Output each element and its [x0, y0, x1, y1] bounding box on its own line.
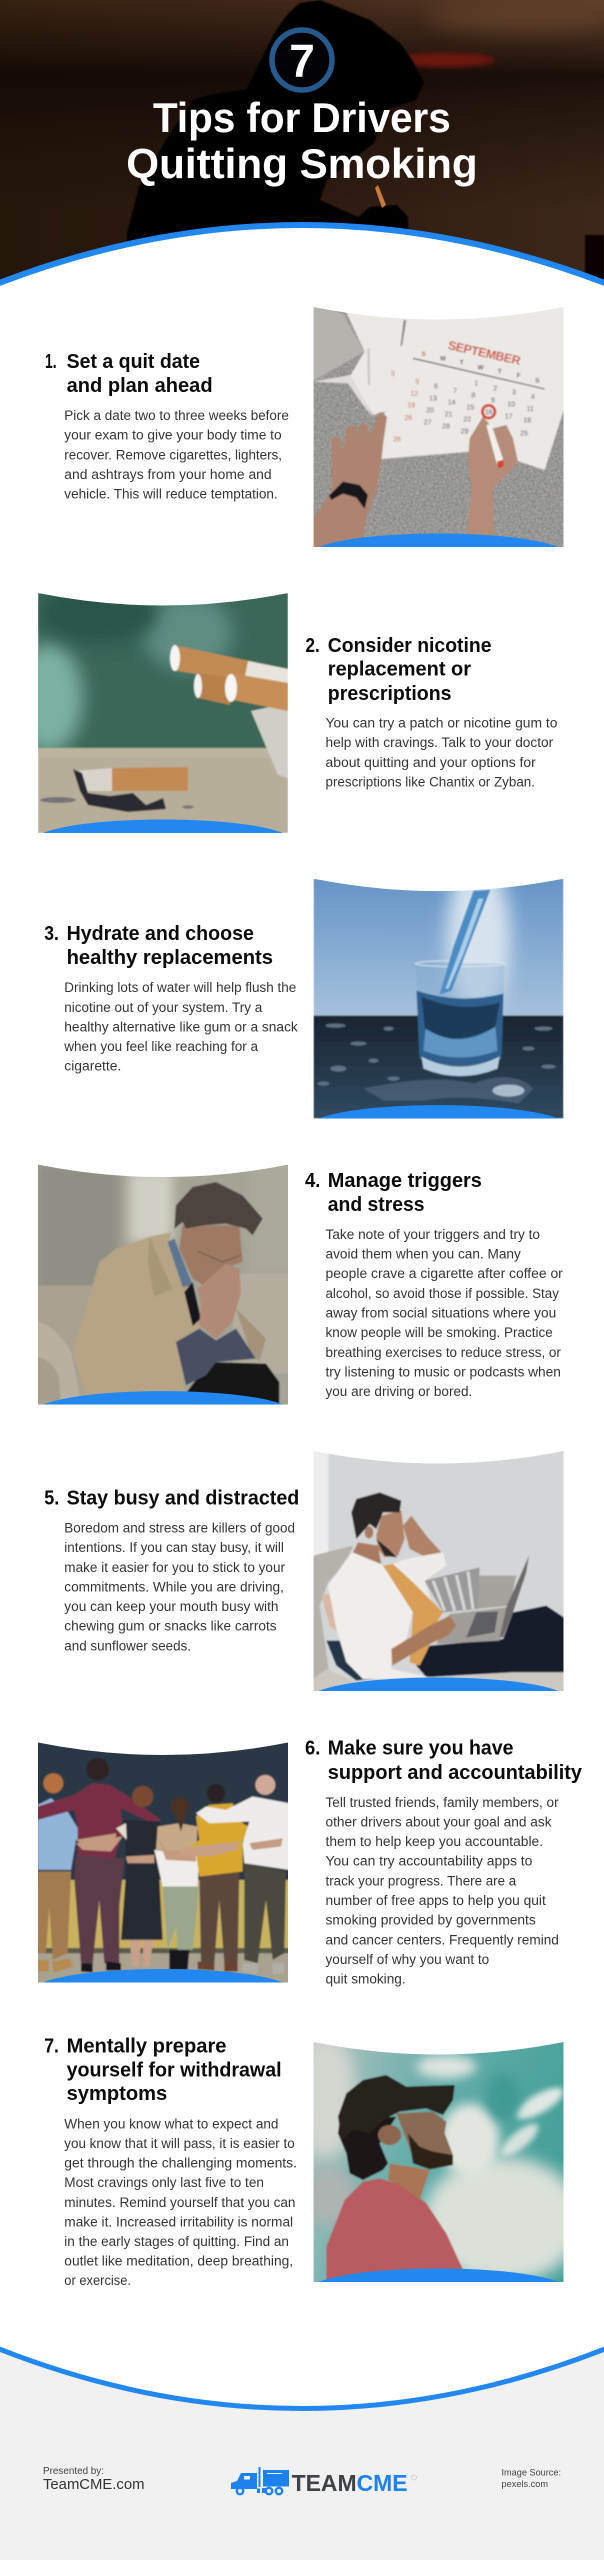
tip 3 heading: 3. [44, 923, 59, 945]
tip 4 body text: alcohol, so avoid those if possible. Stay [326, 1286, 559, 1301]
tip 1 photo: calendar and hands: T [498, 369, 502, 376]
footer: presented by: Presented by: [43, 2465, 104, 2477]
tip 6 heading: support and accountability [328, 1762, 583, 1784]
tip 7 heading: 7. [44, 2036, 59, 2058]
tip 6 body text: quit smoking. [326, 1972, 406, 1987]
tip 7 body text: When you know what to expect and [64, 2116, 278, 2131]
tip 4 body text: people crave a cigarette after coffee or [326, 1266, 563, 1281]
tip 1 photo: calendar and hands: 13 [429, 396, 437, 403]
tip 4 heading: Manage triggers [328, 1170, 482, 1192]
tip 2 body text: about quitting and your options for [326, 755, 536, 770]
tip 3 heading: Hydrate and choose [67, 923, 254, 945]
tip 7 body text: minutes. Remind yourself that you can [64, 2195, 296, 2210]
tip 6 body text: yourself of why you want to [326, 1952, 489, 1967]
tip 1 photo: calendar and hands: 29 [461, 428, 469, 435]
footer: presented by: TeamCME.com [43, 2476, 144, 2493]
tip 4 body text: Take note of your triggers and try to [326, 1227, 540, 1242]
tip 4 body text: you are driving or bored. [326, 1384, 472, 1399]
tip 6 body text: them to help keep you accountable. [326, 1834, 543, 1849]
tip 7 body text [64, 2116, 297, 2288]
tip 1 photo: calendar and hands: 20 [426, 407, 434, 414]
tip 2 heading: Consider nicotine [328, 635, 492, 657]
tip 1 photo: calendar and hands: 22 [463, 416, 471, 423]
tip 4 body text: know people will be smoking. Practice [326, 1325, 553, 1340]
tip 5 heading: Stay busy and distracted [67, 1487, 299, 1509]
footer: image source: Image Source: [502, 2468, 561, 2479]
tip 6 heading [305, 1738, 583, 1784]
tip 5 body text: chewing gum or snacks like carrots [64, 1619, 277, 1634]
tip 7 body text: get through the challenging moments. [64, 2156, 297, 2171]
tip 1 photo: calendar and hands [313, 305, 566, 552]
tip 1 photo: calendar and hands: 21 [445, 412, 453, 419]
tip 5 body text: Boredom and stress are killers of good [64, 1520, 295, 1536]
tip 1 photo: calendar and hands: 3 [512, 390, 516, 397]
tip 5 body text: commitments. While you are driving, [64, 1579, 284, 1594]
tip 2 body text: help with cravings. Talk to your doctor [326, 735, 554, 750]
tip 4 heading: and stress [328, 1194, 424, 1216]
tip 1 body text: recover. Remove cigarettes, lighters, [64, 447, 282, 462]
tip 5 photo: man on sofa with laptop [313, 1449, 566, 1696]
tip 5 heading: 5. [44, 1487, 59, 1509]
tip 2 heading: replacement or [328, 659, 471, 681]
tip 1 photo: calendar and hands: 12 [410, 391, 418, 398]
tip 1 heading [45, 351, 213, 397]
tip 7 body text: make it. Increased irritability is normal [64, 2214, 293, 2229]
tip 2 heading: prescriptions [328, 683, 452, 705]
tip 6 body text: number of free apps to help you quit [326, 1893, 546, 1908]
tip 4 heading [305, 1170, 482, 1216]
header number badge: 7 [289, 34, 315, 86]
top white curve with blue edge [0, 225, 604, 330]
tip 1 photo: calendar and hands: T [460, 359, 464, 366]
tip 3 heading: healthy replacements [67, 947, 273, 969]
tip 4 body text: away from social situations where you [326, 1306, 556, 1320]
tip 1 photo: calendar and hands: 7 [453, 388, 457, 395]
tip 5 body text: make it easier for you to stick to your [64, 1560, 285, 1575]
tip 1 photo: calendar and hands: 18 [523, 418, 531, 425]
header number badge [272, 30, 332, 90]
tip 6 body text: smoking provided by governments [326, 1913, 536, 1928]
tip 7 heading: Mentally prepare [67, 2036, 226, 2058]
title: Tips for Drivers [153, 94, 451, 141]
tip 4 body text [326, 1227, 563, 1399]
tip 7 heading [44, 2036, 282, 2105]
tip 1 body text: Pick a date two to three weeks before [64, 408, 289, 423]
footer: Team CME truck logo [231, 2467, 416, 2496]
tip 1 photo: calendar and hands: 26 [404, 415, 412, 422]
tip 2 body text: prescriptions like Chantix or Zyban. [326, 774, 535, 789]
tip 7 photo: man in cap facing sky [314, 2042, 564, 2282]
tip 7 body text: Most cravings only last five to ten [64, 2175, 264, 2190]
tip 6 body text: and cancer centers. Frequently remind [326, 1932, 559, 1947]
footer panel with blue curve [0, 2347, 604, 2560]
tip 1 photo: calendar and hands: 9 [491, 397, 495, 404]
tip 2 body text [326, 716, 557, 789]
tip 6 body text: Tell trusted friends, family members, or [326, 1795, 559, 1810]
tip 6 heading: 6. [305, 1738, 320, 1760]
tip 2 heading [306, 635, 492, 705]
tip 4 body text: try listening to music or podcasts when [326, 1364, 561, 1379]
tip 7 heading: yourself for withdrawal [67, 2060, 282, 2082]
tip 3 body text: healthy alternative like gum or a snack [64, 1019, 298, 1034]
logo wordmark: TEAMCME [292, 2470, 408, 2496]
header photo: silhouette smoking at dusk [0, 0, 604, 300]
tip 1 body text [64, 408, 289, 502]
tip 7 body text: in the early stages of quitting. Find an [64, 2234, 289, 2249]
footer: presented by [43, 2465, 144, 2493]
tip 1 body text: and ashtrays from your home and [64, 467, 272, 482]
tip 7 body text: outlet like meditation, deep breathing, [64, 2254, 293, 2269]
tip 1 body text: your exam to give your body time to [64, 428, 282, 443]
tip 5 body text: you can keep your mouth busy with [64, 1599, 278, 1614]
tip 6 body text: other drivers about your goal and ask [326, 1814, 552, 1829]
tip 1 photo: calendar and hands: 2 [493, 386, 497, 393]
tip 7 heading: symptoms [67, 2083, 167, 2105]
tip 1 photo: calendar and hands: F [517, 373, 521, 380]
tip 6 body text [326, 1795, 559, 1987]
tip 1 photo: calendar and hands: S [422, 351, 426, 358]
tip 1 heading: Set a quit date [67, 351, 200, 373]
tip 5 body text: and sunflower seeds. [64, 1638, 191, 1653]
tip 3 heading [44, 923, 273, 969]
tip 1 photo: calendar and hands: 5 [415, 379, 419, 386]
footer: image source [502, 2468, 561, 2490]
tip 4 photo: stressed man [36, 1162, 293, 1412]
tip 1 photo: calendar and hands: S [535, 378, 539, 385]
tip 1 photo: calendar and hands: 4 [531, 394, 535, 401]
tip 1 photo: calendar and hands: 17 [505, 413, 513, 420]
tip 3 photo: water pouring into glass [314, 859, 564, 1119]
tip 1 photo: calendar and hands: 1 [474, 381, 478, 388]
tip 1 photo: calendar and hands: 19 [407, 403, 415, 410]
tip 6 photo: group of friends from behind [36, 1740, 293, 1990]
tip 3 body text: nicotine out of your system. Try a [64, 1000, 263, 1015]
tip 2 body text: You can try a patch or nicotine gum to [326, 716, 557, 730]
tip 3 body text: cigarette. [64, 1059, 121, 1074]
tip 4 body text: breathing exercises to reduce stress, or [326, 1345, 561, 1360]
tip 1 photo: calendar and hands: 25 [520, 430, 528, 437]
tip 1 photo: calendar and hands: 14 [448, 400, 456, 407]
tip 1 photo: calendar and hands: 16 [485, 409, 493, 416]
tip 6 body text: track your progress. There are a [326, 1873, 517, 1888]
tip 1 photo: calendar and hands: 15 [466, 404, 474, 411]
tip 2 photo: cigarettes and ash [38, 593, 288, 833]
footer: image source: pexels.com [502, 2479, 548, 2490]
tip 1 heading: 1. [45, 351, 57, 373]
tip 4 body text: avoid them when you can. Many [326, 1247, 521, 1262]
tip 1 photo: calendar and hands: 10 [507, 402, 515, 409]
tip 1 photo: calendar and hands: 6 [434, 384, 438, 391]
tip 6 body text: You can try accountability apps to [326, 1854, 532, 1869]
tip 1 photo: calendar and hands: W [478, 364, 484, 371]
tip 4 heading: 4. [305, 1170, 320, 1192]
icon: truck [231, 2467, 289, 2495]
tip 2 heading: 2. [306, 635, 320, 657]
tip 6 heading: Make sure you have [328, 1738, 514, 1760]
tip 5 body text: intentions. If you can stay busy, it will [64, 1540, 284, 1555]
tip 1 photo: calendar and hands: M [440, 355, 446, 362]
tip 1 body text: vehicle. This will reduce temptation. [64, 487, 278, 502]
tip 1 photo: calendar and hands: 27 [424, 420, 432, 427]
tip 1 photo: calendar and hands: 11 [527, 406, 534, 413]
tip 3 body text [63, 980, 298, 1074]
tip 7 body text: or exercise. [64, 2273, 131, 2288]
title: Quitting Smoking [126, 140, 478, 187]
tip 1 photo: calendar and hands: 5 [391, 371, 395, 378]
tip 3 body text: Drinking lots of water will help flush the [64, 980, 296, 995]
tip 5 body text [64, 1520, 295, 1653]
tip 1 photo: calendar and hands: SEPTEMBER [447, 338, 522, 368]
tip 1 photo: calendar and hands: 8 [471, 392, 475, 399]
tip 7 body text: you know that it will pass, it is easier to [64, 2136, 295, 2151]
tip 1 heading: and plan ahead [67, 375, 213, 397]
tip 1 photo: calendar and hands: 28 [442, 424, 450, 431]
title [126, 94, 478, 187]
tip 1 photo: calendar and hands: 26 [393, 437, 401, 444]
tip 3 body text: when you feel like reaching for a [63, 1039, 258, 1054]
